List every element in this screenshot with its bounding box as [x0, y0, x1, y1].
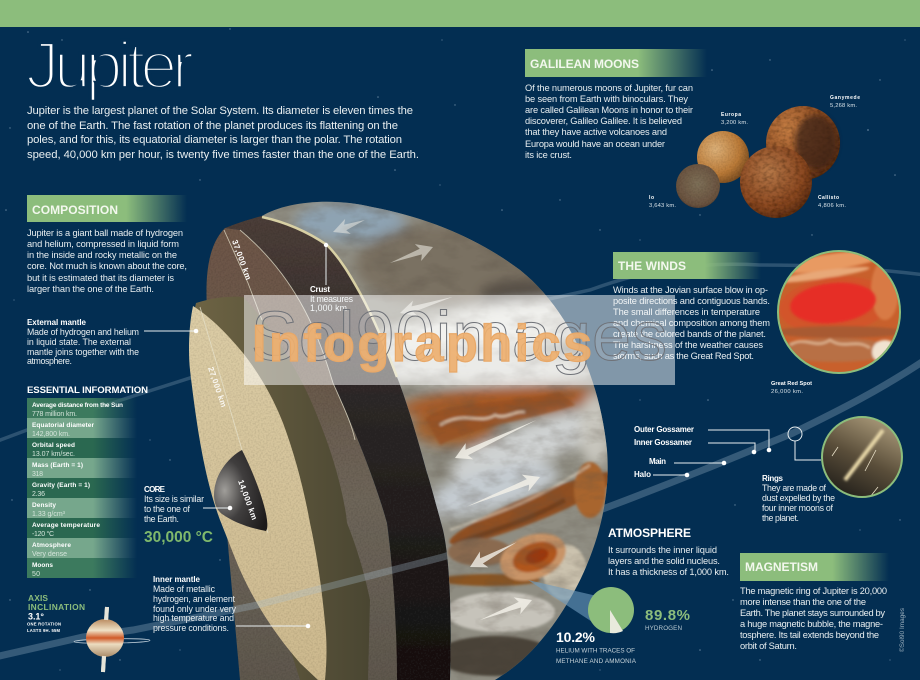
data table: Mass (Earth = 1)	[32, 462, 83, 469]
label: great red spot: Great Red Spot	[771, 381, 812, 387]
galilean moons text: be seen from Earth with binoculars. They	[525, 94, 688, 104]
composition text: in the inside and rocky metallic on the	[27, 250, 177, 260]
pie chart	[588, 587, 634, 633]
galilean moons heading	[525, 49, 707, 77]
intro paragraph: one of the Earth. The fast rotation of the planet produces its flattening on the	[27, 120, 398, 132]
axis inclination: LASTS 9H. 55M	[27, 628, 60, 633]
composition text: core. Not much is known about the core,	[27, 261, 187, 271]
hydrogen figure: HYDROGEN	[645, 625, 682, 632]
label: outer gossamer	[634, 425, 771, 452]
callout: inner mantle: Inner mantle	[153, 575, 201, 584]
galilean moons text: that they have active volcanoes and	[525, 127, 667, 137]
atmosphere text: It has a thickness of 1,000 km.	[608, 567, 729, 577]
helium figure: HELIUM WITH TRACES OF	[556, 648, 635, 654]
axis inclination: 3.1°	[28, 612, 44, 622]
magnetism text: Earth. The planet stays surrounded by	[740, 608, 885, 618]
label: inner gossamer: Inner Gossamer	[634, 438, 692, 447]
callout: core	[144, 485, 232, 546]
label: Ganymede: 5,268 km.	[830, 103, 857, 109]
planet cutaway	[0, 195, 920, 680]
data table: 1.33 g/cm³	[32, 511, 66, 518]
panel: galilean moons	[525, 49, 860, 218]
the winds heading	[613, 252, 761, 279]
watermark: Infographics	[252, 315, 592, 373]
layer: brown and grey mantle face	[206, 228, 397, 680]
data table	[27, 398, 137, 578]
composition text: larger than the one of the Earth.	[27, 284, 154, 294]
callout: external mantle: External mantle	[27, 318, 87, 327]
layer: dark inner band	[225, 216, 451, 680]
rings close-up image	[822, 417, 902, 497]
galilean moons text: are called Galilean Moons in honor to their	[525, 105, 693, 115]
the winds text: create the colored bands of the planet.	[613, 329, 766, 339]
diameter label 37,000 km: 37,000 km	[230, 239, 253, 281]
data table: Gravity (Earth = 1)	[32, 482, 90, 489]
panel: composition	[27, 195, 187, 294]
moon: Callisto	[740, 146, 812, 218]
rings text: They are made of	[762, 483, 827, 493]
top green bar	[0, 0, 920, 27]
data table: 318	[32, 471, 43, 478]
data table: Average temperature	[32, 522, 100, 529]
moon: Io	[676, 164, 720, 208]
data table: -120 °C	[32, 530, 54, 538]
panel: atmosphere	[528, 526, 729, 665]
layer boundary lines	[200, 230, 355, 533]
composition text: but it is estimated that its diameter is	[27, 273, 174, 283]
magnetism text: more intense than the one of the	[740, 597, 866, 607]
label: halo: Halo	[634, 470, 651, 479]
magnetism text: orbit of Saturn.	[740, 641, 797, 651]
callout: external mantle	[27, 318, 198, 366]
panel: the winds	[613, 246, 905, 395]
galilean moons text: its ice crust.	[525, 150, 572, 160]
data table: 2.36	[32, 491, 45, 498]
wind arrows	[330, 213, 543, 628]
callout: inner mantle: found only under very	[153, 604, 237, 614]
atmosphere text: It surrounds the inner liquid	[608, 545, 717, 555]
intro paragraph	[27, 105, 419, 161]
composition text	[27, 228, 187, 294]
label: outer gossamer: Outer Gossamer	[634, 425, 694, 434]
rings text	[762, 474, 835, 523]
callout: crust: Crust	[310, 285, 330, 294]
callout: inner mantle: pressure conditions.	[153, 623, 229, 633]
callout: external mantle: atmosphere.	[27, 356, 72, 366]
the winds text: The small differences in temperature	[613, 307, 760, 317]
magnetism text: tosphere. Its tail extends beyond the	[740, 630, 879, 640]
intro paragraph: poles, and for this, its equatorial diameter is larger than the polar. The rotation	[27, 134, 402, 146]
essential information heading: ESSENTIAL INFORMATION	[27, 385, 148, 396]
composition text: and helium, compressed in liquid form	[27, 239, 179, 249]
diameter label 27,000 km: 27,000 km	[206, 366, 228, 408]
helium figure: METHANE AND AMMONIA	[556, 658, 637, 665]
layer: outer surface with cloud bands	[255, 195, 625, 680]
label: great red spot: 26,000 km.	[771, 389, 803, 395]
hydrogen figure	[645, 607, 690, 632]
data table: 50	[32, 571, 40, 578]
data table: Very dense	[32, 551, 67, 558]
front ring over mantle	[0, 360, 920, 657]
the winds text: and chemical composition among them	[613, 318, 770, 328]
the winds heading: THE WINDS	[618, 259, 686, 273]
rings text: dust expelled by the	[762, 493, 835, 503]
moon: Ganymede	[766, 106, 840, 180]
panel: ring labels	[634, 417, 902, 523]
label: Callisto	[818, 195, 846, 209]
credit: ©Sol90 Images	[898, 608, 906, 652]
helium figure: 10.2%	[556, 629, 596, 645]
crust edge	[262, 217, 397, 377]
data table: 142,800 km.	[32, 431, 70, 438]
axis inclination	[27, 593, 150, 672]
rings text: Rings	[762, 474, 784, 483]
callout: crust: It measures	[310, 294, 354, 304]
title: Jupiter	[26, 28, 194, 102]
the winds text: storms, such as the Great Red Spot.	[613, 351, 754, 361]
label: Io: 3,643 km.	[649, 203, 676, 209]
callout: inner mantle	[153, 575, 310, 633]
axis inclination: ONE ROTATION	[27, 622, 61, 626]
layer: beige front face	[189, 306, 326, 680]
label: Europa	[721, 112, 748, 126]
the winds text	[613, 285, 770, 361]
data table: Moons	[32, 562, 53, 569]
atmosphere text	[608, 545, 729, 577]
callout: crust: 1,000 km	[310, 303, 347, 313]
magnetism text: a huge magnetic bubble, the magne-	[740, 619, 883, 629]
galilean moons text: Europa would have an ocean under	[525, 139, 665, 149]
magnetism heading: MAGNETISM	[745, 560, 818, 574]
panel: essential information	[27, 385, 148, 578]
atmosphere text: layers and the solid nucleus.	[608, 556, 720, 566]
core hemisphere	[214, 450, 267, 531]
the winds text: The harshness of the weather causes	[613, 340, 763, 350]
callout: inner mantle: high temperature and	[153, 613, 234, 623]
beam to pie chart	[528, 580, 600, 627]
composition heading	[27, 195, 187, 222]
callout: external mantle: Made of hydrogen and helium	[27, 327, 139, 337]
data table: Orbital speed	[32, 442, 75, 449]
ring detail marker	[788, 427, 821, 460]
label: halo	[634, 470, 689, 479]
great red spot image	[777, 250, 901, 374]
intro paragraph: speed, 40,000 km per hour, is twenty five times faster than the one of the Earth.	[27, 149, 419, 161]
intro paragraph: Jupiter is the largest planet of the Solar System. Its diameter is eleven times the	[27, 105, 413, 117]
the winds text: Winds at the Jovian surface blow in op-	[613, 285, 768, 295]
helium figure	[556, 629, 637, 665]
galilean moons text: Of the numerous moons of Jupiter, fur can	[525, 83, 693, 93]
rings text: the planet.	[762, 513, 799, 523]
core temperature: 30,000 °C	[144, 529, 213, 546]
data table: 778 million km.	[32, 411, 77, 418]
watermark: Sol90images	[251, 297, 667, 375]
label: Europa: Europa	[721, 112, 741, 118]
data table: Density	[32, 502, 56, 509]
label: Europa: 3,200 km.	[721, 120, 748, 126]
callout: core: Its size is similar	[144, 494, 204, 504]
callout: core: to the one of	[144, 504, 191, 514]
panel: magnetism	[740, 553, 889, 651]
label: main	[649, 457, 726, 466]
data table: Average distance from the Sun	[32, 402, 123, 409]
magnetism text	[740, 586, 887, 651]
axis inclination: AXIS	[28, 593, 48, 603]
galilean moons text: discoverer, Galileo Galilee. It is believed	[525, 116, 682, 126]
layer: olive band	[190, 297, 370, 680]
label: Io	[649, 195, 676, 209]
label: Ganymede	[830, 95, 860, 109]
galilean moons heading: GALILEAN MOONS	[530, 57, 639, 71]
callout: core: the Earth.	[144, 514, 179, 524]
label: inner gossamer	[634, 438, 756, 454]
galilean moons text	[525, 83, 693, 160]
the winds text: posite directions and contiguous bands.	[613, 296, 770, 306]
label: main: Main	[649, 457, 666, 466]
callout: inner mantle: Made of metallic	[153, 584, 216, 594]
back ring arc	[0, 264, 920, 442]
rings text: four inner moons of	[762, 503, 834, 513]
data table: Atmosphere	[32, 542, 71, 549]
atmosphere heading: ATMOSPHERE	[608, 526, 691, 540]
icon: small Jupiter with tilted axis	[74, 607, 150, 672]
magnetism text: The magnetic ring of Jupiter is 20,000	[740, 586, 887, 596]
callout: crust	[310, 243, 354, 313]
callout: core: CORE	[144, 485, 166, 494]
callout: external mantle: in liquid state. The external	[27, 337, 131, 347]
label: Io: Io	[649, 195, 654, 201]
magnetism heading	[740, 553, 889, 581]
data table: Equatorial diameter	[32, 422, 94, 429]
composition text: Jupiter is a giant ball made of hydrogen	[27, 228, 183, 238]
callout: external mantle: mantle joins together with the	[27, 347, 139, 357]
label: Callisto: 4,806 km.	[818, 203, 846, 209]
axis inclination: INCLINATION	[28, 602, 85, 612]
diameter label 14,000 km: 14,000 km	[236, 479, 259, 521]
label: Callisto: Callisto	[818, 195, 839, 201]
moon: Europa	[697, 131, 749, 183]
composition heading: COMPOSITION	[32, 203, 118, 217]
hydrogen figure: 89.8%	[645, 607, 690, 624]
callout: inner mantle: hydrogen, an element	[153, 594, 236, 604]
data table: 13.07 km/sec.	[32, 451, 75, 458]
label: great red spot	[771, 381, 812, 395]
label: Ganymede: Ganymede	[830, 95, 860, 101]
